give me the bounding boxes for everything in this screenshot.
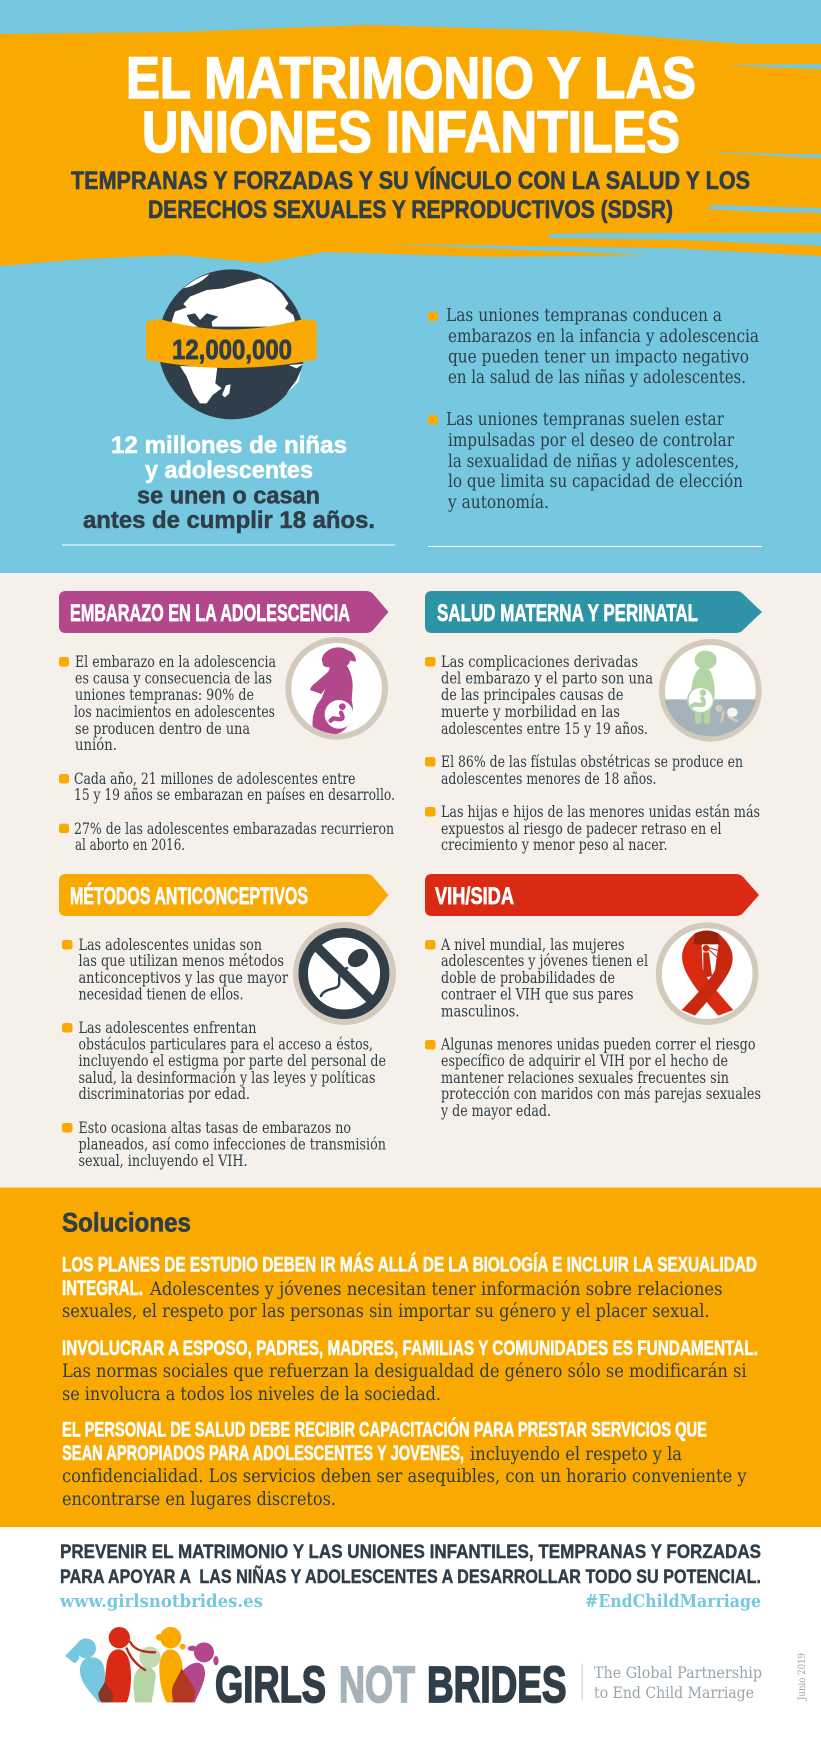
logo: GIRLS NOT BRIDES wordmark: [215, 1656, 566, 1713]
text block: early unions bullets: que pueden tener un impacto negativo: [448, 348, 749, 368]
link: hashtag: #EndChildMarriage: [585, 1591, 761, 1612]
text: embarazo bullets: uniones tempranas: 90% de: [75, 686, 254, 704]
logo: girls silhouettes: [65, 1627, 219, 1702]
text block: early unions bullets: en la salud de las niñas y adolescentes.: [448, 368, 746, 388]
text block: call to action: [60, 1542, 761, 1588]
text: VIH bullets: [425, 936, 761, 1120]
text: salud materna bullets: adolescentes entre 15 y 19 años.: [441, 720, 648, 738]
panel: métodos anticonceptivos: [59, 874, 393, 1170]
title: EL MATRIMONIO Y LAS: [126, 46, 696, 111]
text: embarazo bullets: los nacimientos en adolescentes: [74, 703, 275, 721]
icon: globe with 12,000,000 banner: 12,000,000: [172, 334, 292, 365]
text: embarazo bullets: 15 y 19 años se embarazan en países en desarrollo.: [74, 786, 395, 804]
text block: 12 million headline: [83, 432, 375, 534]
text: salud materna bullets: El 86% de las fístulas obstétricas se produce en: [441, 753, 743, 771]
text: VIH bullets: mantener relaciones sexuales frecuentes sin: [441, 1069, 729, 1087]
panel: orange brush banner: [0, 25, 821, 266]
text: VIH bullets: protección con maridos con más parejas sexuales: [441, 1085, 761, 1103]
logo: tagline: The Global Partnership: [594, 1663, 762, 1682]
text block: early unions bullets: [428, 306, 759, 513]
solution 1: sexuales, el respeto por las personas sin importar su género y el placer sexual.: [62, 1300, 710, 1322]
text block: early unions bullets: Las uniones tempranas conducen a: [446, 306, 722, 326]
text: VIH bullets: doble de probabilidades de: [441, 969, 615, 987]
text: métodos bullets: Las adolescentes enfrentan: [78, 1019, 257, 1037]
overlap shapes: [98, 1682, 113, 1702]
heading: métodos: MÉTODOS ANTICONCEPTIVOS: [70, 882, 308, 910]
text: salud materna bullets: Las complicaciones derivadas: [441, 653, 638, 671]
panel: VIH/SIDA: [425, 874, 761, 1120]
heading: soluciones: Soluciones: [62, 1208, 191, 1238]
solution 1: INTEGRAL.: [62, 1277, 143, 1300]
icon: red ribbon: [659, 925, 755, 1022]
heading: embarazo: [59, 591, 388, 633]
text: métodos bullets: Las adolescentes unidas son: [78, 936, 262, 954]
text: métodos bullets: necesidad tienen de ellos.: [78, 986, 244, 1004]
panel: soluciones: [0, 1188, 821, 1527]
text: salud materna bullets: expuestos al riesgo de padecer retraso en el: [441, 820, 722, 838]
text: salud materna bullets: del embarazo y el parto son una: [441, 670, 653, 688]
text block: early unions bullets: embarazos en la infancia y adolescencia: [448, 327, 759, 347]
logo: GIRLS NOT BRIDES wordmark: BRIDES: [427, 1656, 566, 1713]
text: salud materna bullets: de las principales causas de: [441, 686, 624, 704]
text: métodos bullets: las que utilizan menos métodos: [78, 952, 284, 970]
heading: salud materna: SALUD MATERNA Y PERINATAL: [437, 600, 698, 627]
braids: [127, 1642, 155, 1670]
text: VIH bullets: contraer el VIH que sus pares: [441, 986, 634, 1004]
solution 3: SEAN APROPIADOS PARA ADOLESCENTES Y JOVENES,: [62, 1442, 464, 1465]
text block: 12 million headline: y adolescentes: [145, 457, 313, 484]
solution 2: se involucra a todos los niveles de la sociedad.: [62, 1383, 441, 1405]
text: métodos bullets: sexual, incluyendo el VIH.: [78, 1152, 248, 1170]
text: métodos bullets: anticonceptivos y las que mayor: [78, 969, 288, 987]
text: métodos bullets: salud, la desinformación y las leyes y políticas: [78, 1069, 376, 1087]
text: embarazo bullets: al aborto en 2016.: [75, 836, 185, 854]
orange girl: [156, 1627, 186, 1702]
text: salud materna bullets: [425, 653, 760, 854]
text: embarazo bullets: unión.: [75, 736, 117, 754]
text block: 12 million headline: se unen o casan: [137, 482, 320, 510]
text block: call to action: PREVENIR EL MATRIMONIO Y LAS UNIONES INFANTILES, TEMPRANAS Y FORZADAS: [60, 1542, 761, 1563]
text: embarazo bullets: [59, 653, 395, 854]
purple girl: [172, 1642, 219, 1702]
text: métodos bullets: obstáculos particulares para el acceso a éstos,: [78, 1036, 373, 1054]
text: embarazo bullets: 27% de las adolescentes embarazadas recurrieron: [74, 820, 394, 838]
text block: 12 million headline: 12 millones de niñas: [111, 432, 347, 459]
date note: Junio 2019: [797, 1653, 808, 1701]
heading: VIH/SIDA: [425, 874, 759, 916]
heading: VIH/SIDA: VIH/SIDA: [435, 883, 514, 910]
text: VIH bullets: A nivel mundial, las mujeres: [440, 936, 625, 954]
subtitle: [71, 166, 750, 224]
text block: 12 million headline: antes de cumplir 18 años.: [83, 507, 375, 534]
icon: globe with 12,000,000 banner: [146, 269, 317, 419]
heading: embarazo: EMBARAZO EN LA ADOLESCENCIA: [70, 600, 350, 627]
icon: pregnant girl: [288, 640, 385, 737]
text: salud materna bullets: Las hijas e hijos de las menores unidas están más: [441, 803, 760, 821]
heading: salud materna: [425, 591, 762, 633]
panel: blue header background: [0, 0, 821, 573]
icon: pregnant girl with toddler: [662, 642, 759, 739]
text: métodos bullets: planeados, así como infecciones de transmisión: [78, 1136, 386, 1154]
subtitle: DERECHOS SEXUALES Y REPRODUCTIVOS (SDSR): [148, 196, 673, 224]
logo: tagline: to End Child Marriage: [594, 1683, 754, 1702]
text: salud materna bullets: crecimiento y menor peso al nacer.: [441, 836, 668, 854]
panel: salud materna y perinatal: [425, 591, 762, 854]
text: salud materna bullets: muerte y morbilidad en las: [441, 703, 620, 721]
panel: embarazo en la adolescencia: [59, 591, 395, 854]
text block: early unions bullets: lo que limita su capacidad de elección: [448, 472, 743, 492]
text: embarazo bullets: El embarazo en la adolescencia: [75, 653, 276, 671]
text block: early unions bullets: impulsadas por el deseo de controlar: [448, 431, 735, 451]
solution 1: Adolescentes y jóvenes necesitan tener información sobre relaciones: [149, 1278, 722, 1300]
solution 3: incluyendo el respeto y la: [470, 1443, 682, 1465]
text: métodos bullets: [62, 936, 386, 1170]
green girl: [133, 1647, 161, 1702]
logo: GIRLS NOT BRIDES wordmark: NOT: [339, 1656, 415, 1713]
logo: GIRLS NOT BRIDES wordmark: GIRLS: [215, 1656, 326, 1713]
link: website: www.girlsnotbrides.es: [59, 1591, 263, 1612]
text: salud materna bullets: adolescentes menores de 18 años.: [441, 770, 656, 788]
text: VIH bullets: Algunas menores unidas pueden correr el riesgo: [440, 1036, 756, 1054]
red girl: [102, 1627, 131, 1702]
solution 3: encontrarse en lugares discretos.: [62, 1488, 336, 1510]
panel: body background: [0, 573, 821, 1188]
title: [126, 46, 696, 165]
text: métodos bullets: discriminatorias por edad.: [78, 1085, 250, 1103]
text block: early unions bullets: y autonomía.: [447, 493, 549, 513]
text: embarazo bullets: Cada año, 21 millones de adolescentes entre: [74, 770, 356, 788]
solution 3: [62, 1418, 747, 1510]
solution 2: [62, 1337, 758, 1405]
blue girl: [65, 1638, 105, 1702]
text: embarazo bullets: se producen dentro de una: [75, 720, 250, 738]
text: VIH bullets: masculinos.: [441, 1002, 520, 1020]
text: métodos bullets: incluyendo el estigma por parte del personal de: [78, 1052, 386, 1070]
text: embarazo bullets: es causa y consecuencia de las: [75, 670, 272, 688]
logo: tagline: [594, 1663, 762, 1702]
heading: métodos: [59, 874, 388, 916]
text: VIH bullets: adolescentes y jóvenes tienen el: [441, 952, 648, 970]
text block: early unions bullets: Las uniones tempranas suelen estar: [446, 410, 725, 430]
text: VIH bullets: específico de adquirir el VIH por el hecho de: [441, 1052, 728, 1070]
text: VIH bullets: y de mayor edad.: [440, 1102, 551, 1120]
icon: no contraception sperm: [296, 925, 393, 1022]
text block: early unions bullets: la sexualidad de niñas y adolescentes,: [448, 452, 739, 472]
text: métodos bullets: Esto ocasiona altas tasas de embarazos no: [78, 1119, 351, 1137]
solution 1: [62, 1254, 757, 1322]
title: UNIONES INFANTILES: [142, 100, 680, 165]
